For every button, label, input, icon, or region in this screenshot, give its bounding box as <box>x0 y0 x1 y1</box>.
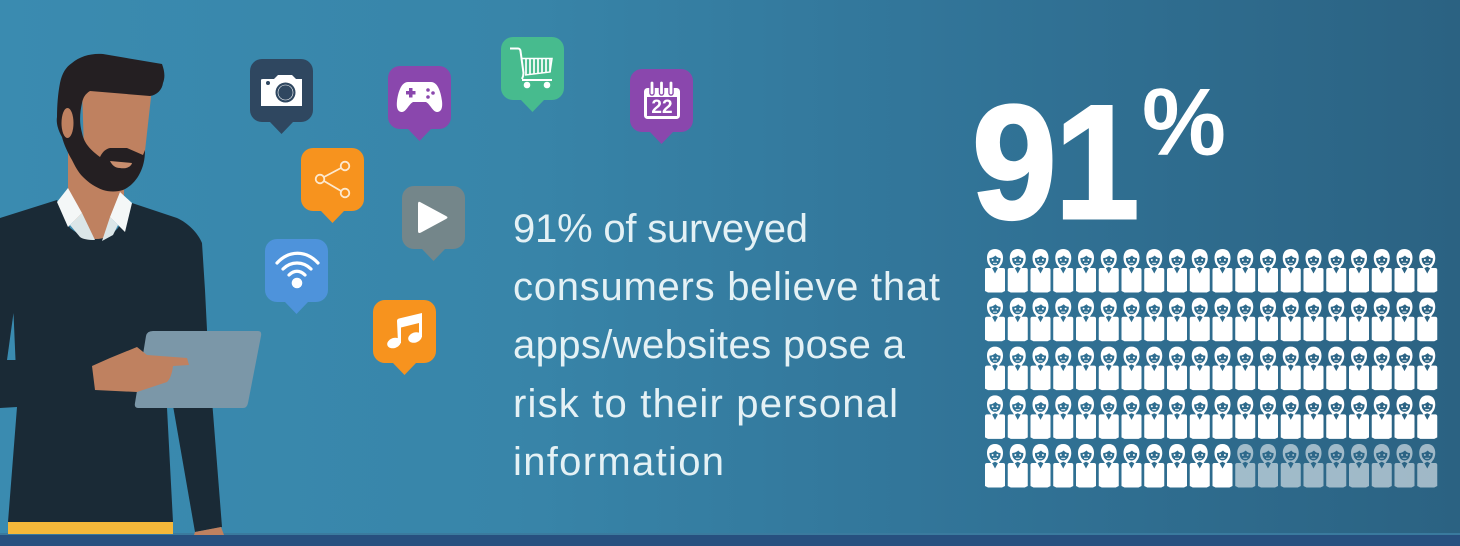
collar <box>57 188 132 241</box>
icon: share <box>301 148 364 223</box>
icon: music <box>373 300 436 375</box>
tablet <box>135 331 261 408</box>
sweater <box>0 200 208 522</box>
shirt hem <box>8 522 173 534</box>
icon: camera <box>250 59 313 134</box>
mouth <box>110 161 132 168</box>
bottom band <box>0 533 1460 546</box>
icon: game controller <box>388 66 451 141</box>
big statistic 91%: % <box>1142 69 1226 176</box>
body text: 91% of surveyed <box>513 207 808 251</box>
icon: calendar <box>630 69 693 144</box>
body text: consumers believe that <box>513 265 940 309</box>
body text <box>513 207 940 484</box>
arm gap <box>7 313 16 360</box>
body text: risk to their personal <box>513 382 898 426</box>
man with tablet <box>0 54 261 535</box>
wrist <box>194 527 224 535</box>
calendar date: 22 <box>651 97 673 118</box>
hair and beard <box>57 54 164 192</box>
big statistic 91%: 91 <box>972 73 1139 253</box>
icon: play <box>402 186 465 261</box>
pictogram: 91 of 100 people <box>985 249 1437 488</box>
ear <box>62 108 74 138</box>
icon: shopping cart <box>501 37 564 112</box>
face <box>82 88 152 175</box>
neck <box>68 150 124 245</box>
big statistic 91% <box>972 69 1226 253</box>
right sleeve <box>172 400 222 532</box>
body text: apps/websites pose a <box>513 323 906 367</box>
icon: wifi <box>265 239 328 314</box>
body text: information <box>513 440 724 484</box>
hand <box>92 347 189 392</box>
